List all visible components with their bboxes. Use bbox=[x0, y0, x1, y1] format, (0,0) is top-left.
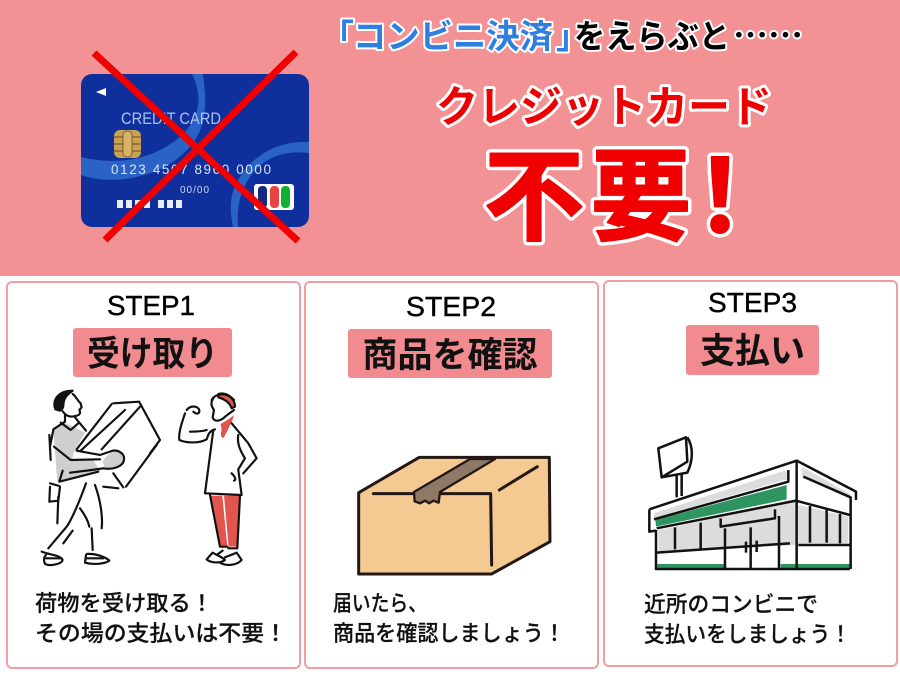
headline: not required: ！ bbox=[670, 142, 770, 254]
panel: step 2 bbox=[305, 282, 598, 668]
card brand mark bbox=[254, 184, 294, 210]
icon: delivery man carrying box bbox=[42, 391, 160, 565]
credit card: CREDIT CARD bbox=[121, 109, 221, 128]
headline: not required: 要 bbox=[591, 142, 691, 254]
step 2 tag bbox=[348, 329, 552, 378]
credit card bbox=[81, 74, 309, 227]
step 3 tag: 支払い bbox=[700, 332, 805, 371]
step 1 heading: STEP1 bbox=[107, 290, 195, 321]
headline: konbini payment: をえらぶと bbox=[574, 18, 730, 55]
headline: not required: 不 bbox=[484, 142, 584, 254]
headline: not required: ！ bbox=[670, 142, 770, 254]
headline: not required: 不 bbox=[484, 142, 584, 254]
icon: crossed-out credit card bbox=[81, 52, 309, 241]
headline: konbini payment: …… bbox=[733, 8, 803, 59]
step 3 caption: 近所のコンビニで bbox=[644, 592, 818, 617]
step 2 caption: 商品を確認しましょう！ bbox=[333, 621, 565, 646]
panel: step 1 bbox=[7, 282, 300, 668]
icon: cardboard box bbox=[359, 457, 550, 574]
step 2 heading: STEP2 bbox=[406, 291, 496, 322]
credit card: 0123 4567 8960 0000 bbox=[111, 162, 271, 177]
step 1 caption: 荷物を受け取る！ bbox=[35, 591, 213, 616]
step 3 tag bbox=[686, 325, 819, 375]
headline: konbini payment: 」 bbox=[556, 18, 589, 55]
credit card: 00/00 bbox=[180, 185, 209, 196]
step 2 tag: 商品を確認 bbox=[362, 336, 538, 375]
red cross bbox=[94, 52, 298, 241]
step 2 caption: 届いたら、 bbox=[333, 591, 427, 616]
icon: convenience store bbox=[649, 437, 856, 569]
headline: konbini payment: コンビニ決済 bbox=[353, 18, 553, 55]
headline: not required: 要 bbox=[591, 142, 691, 254]
step 1 tag: 受け取り bbox=[87, 335, 218, 374]
headline: not required bbox=[484, 142, 770, 254]
step 3 heading: STEP3 bbox=[708, 287, 797, 318]
step 1 caption: その場の支払いは不要！ bbox=[35, 621, 287, 646]
header band bbox=[0, 0, 900, 276]
icon: woman flexing arm bbox=[179, 394, 257, 565]
panel: step 3 bbox=[604, 281, 897, 666]
headline: credit card: クレジットカード bbox=[436, 84, 772, 132]
step 3 caption: 支払いをしましょう！ bbox=[644, 622, 851, 647]
chip bbox=[114, 130, 141, 158]
headline: konbini payment: 「 bbox=[321, 18, 354, 55]
